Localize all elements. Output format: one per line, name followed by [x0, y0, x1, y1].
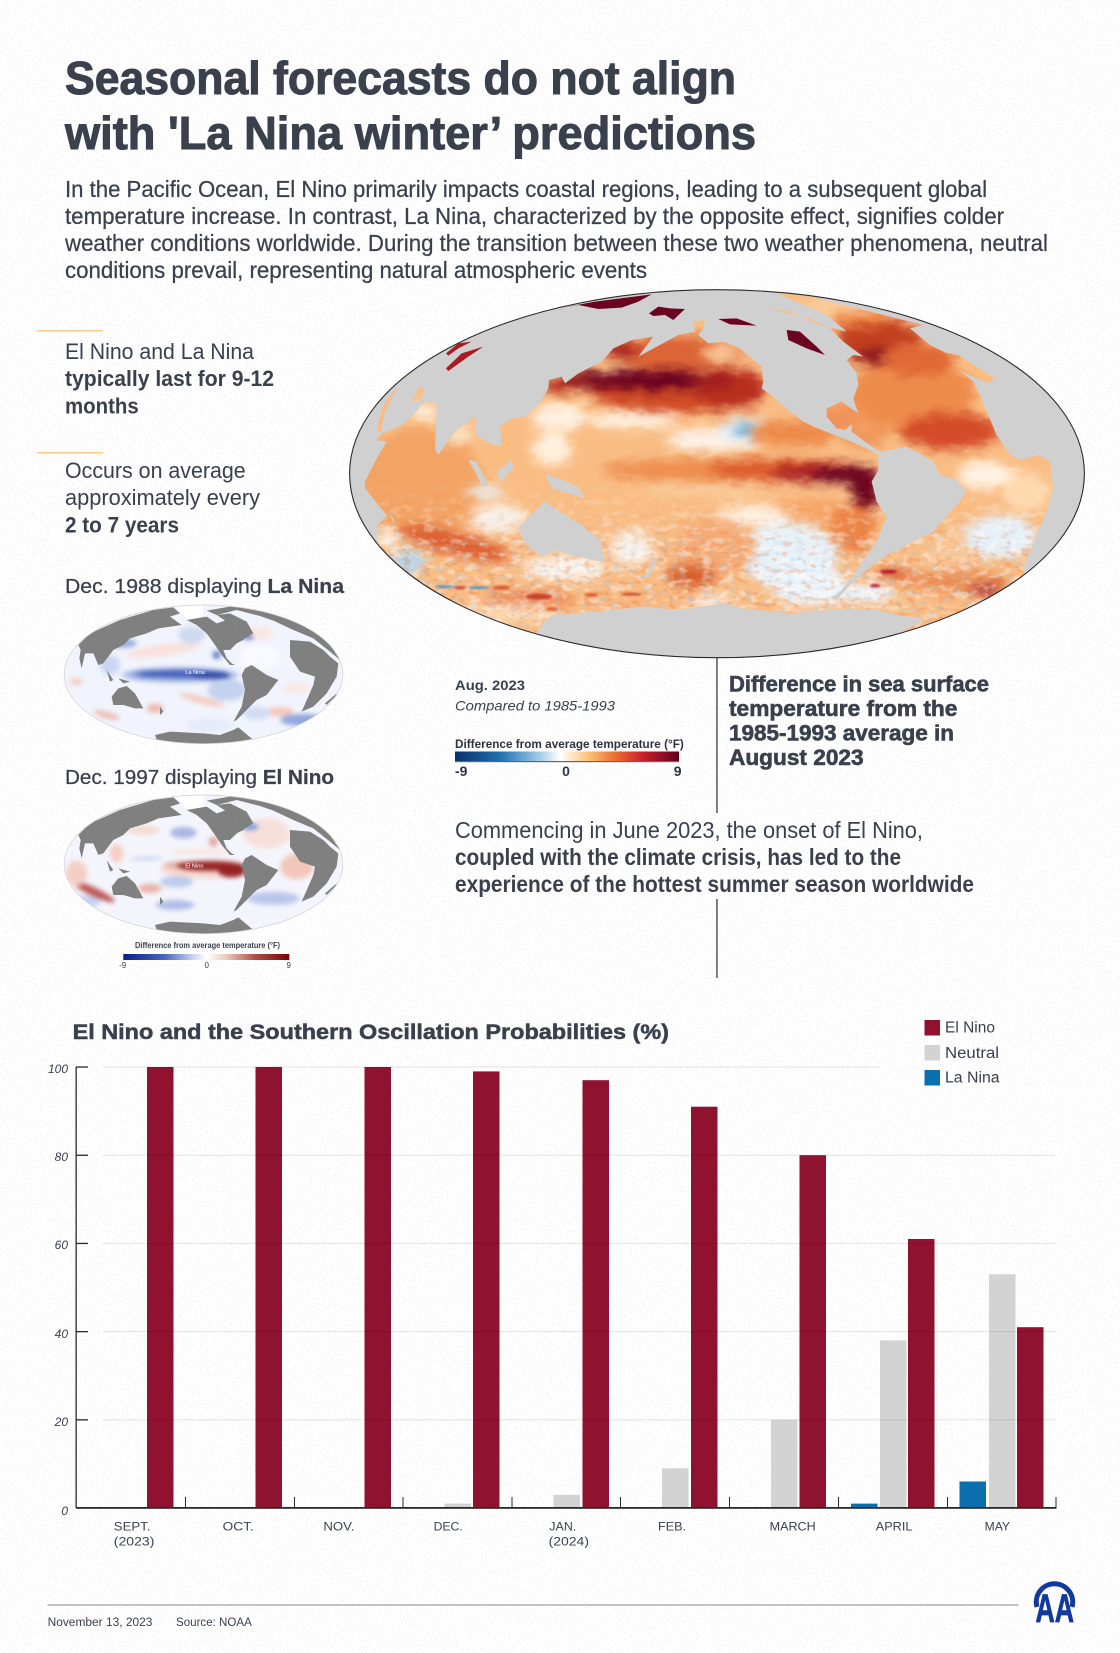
text block: El Nino onset and hottest summer: coupled with the climate crisis, has led to the: [455, 844, 901, 870]
heading: difference in sea surface temperature: 1985-1993 average in: [729, 720, 954, 746]
heading: difference in sea surface temperature: [729, 672, 989, 770]
text block: El Nino onset and hottest summer: [455, 817, 974, 897]
chart title: El Nino and the Southern Oscillation Probabilities (%): [73, 1021, 669, 1044]
text block: El Nino onset and hottest summer: Commencing in June 2023, the onset of El Nino,: [455, 817, 923, 843]
legend: small maps color scale: 0: [204, 961, 209, 970]
callout: El Nino and La Nina duration: El Nino and La Nina: [65, 339, 255, 364]
title: with 'La Nina winter’ predictions: [64, 107, 756, 159]
x axis: [76, 1497, 1056, 1509]
x axis labels: (2023): [114, 1537, 155, 1549]
x axis labels: MAY: [985, 1522, 1010, 1534]
y axis labels: 100: [48, 1062, 68, 1076]
y axis labels: [48, 1062, 68, 1518]
chart legend: [924, 1020, 1000, 1087]
ocean mottling: [365, 486, 1048, 633]
intro paragraph: weather conditions worldwide. During the transition between these two weather phenomena, neutral: [64, 230, 1048, 256]
y axis labels: 0: [61, 1504, 68, 1518]
intro paragraph: In the Pacific Ocean, El Nino primarily impacts coastal regions, leading to a subsequent global: [65, 176, 987, 202]
legend item: La Nina: La Nina: [945, 1070, 1000, 1087]
title: [64, 52, 756, 159]
x axis labels: MARCH: [770, 1522, 816, 1534]
intro paragraph: [64, 176, 1048, 283]
legend: small maps color scale: Difference from average temperature (°F): [135, 941, 280, 950]
legend: small maps color scale: -9: [119, 961, 127, 970]
legend: main map color scale: 0: [562, 763, 570, 779]
x axis labels: APRIL: [876, 1522, 913, 1534]
small map: Dec. 1997 El Nino: [64, 794, 344, 934]
small map: Dec. 1988 La Nina: [64, 604, 344, 744]
legend: main map color scale: Difference from average temperature (°F): [455, 737, 684, 751]
y axis labels: 20: [54, 1415, 68, 1429]
legend item: El Nino: El Nino: [945, 1020, 995, 1037]
footer: date and source: [48, 1604, 1019, 1629]
bars: Neutral: [444, 1274, 1016, 1508]
legend: main map color scale: -9: [455, 763, 468, 779]
y axis: [76, 1066, 88, 1508]
legend: small maps color scale: [119, 941, 291, 970]
y axis labels: 80: [55, 1150, 68, 1164]
callout: El Nino and La Nina duration: [37, 330, 274, 418]
map caption: date and comparison: Aug. 2023: [455, 677, 525, 693]
heading: difference in sea surface temperature: temperature from the: [729, 696, 957, 721]
footer: date and source: Source: NOAA: [176, 1617, 252, 1629]
y axis labels: 40: [55, 1327, 68, 1341]
small map: Dec. 1997 El Nino: El Nino: [185, 863, 203, 869]
callout: El Nino and La Nina duration: months: [65, 394, 139, 418]
title: Seasonal forecasts do not align: [65, 52, 736, 104]
legend: small maps color scale: 9: [286, 961, 291, 970]
legend item: Neutral: Neutral: [945, 1045, 999, 1062]
y axis labels: 60: [55, 1238, 68, 1252]
intro paragraph: temperature increase. In contrast, La Nina, characterized by the opposite effect, signifies colder: [65, 203, 1004, 229]
x axis labels: [114, 1522, 1010, 1549]
logo: AA: [1036, 1584, 1074, 1631]
bar chart: ENSO probabilities: [48, 1062, 1056, 1549]
heading: Dec. 1997 El Nino: Dec. 1997 displaying El Nino: [65, 767, 334, 789]
map caption: date and comparison: Compared to 1985-1993: [455, 698, 615, 714]
legend: main map color scale: 9: [674, 763, 682, 779]
x axis labels: FEB.: [658, 1522, 686, 1534]
callout: El Nino and La Nina duration: typically last for 9-12: [65, 366, 274, 391]
x axis labels: SEPT.: [114, 1522, 150, 1534]
callout: occurrence frequency: [37, 452, 260, 538]
callout: occurrence frequency: Occurs on average: [65, 458, 246, 483]
bars: El Nino: [147, 1067, 1044, 1508]
legend: main map color scale: [455, 737, 684, 779]
footer: date and source: November 13, 2023: [48, 1617, 152, 1629]
world map: August 2023 sea surface temperature difference: [349, 289, 1085, 658]
small map: Dec. 1988 La Nina: La Nina: [185, 670, 206, 676]
bars: La Nina: [851, 1482, 986, 1508]
vertical connector line: [716, 899, 718, 978]
heading: Dec. 1988 La Nina: Dec. 1988 displaying La Nina: [65, 576, 345, 598]
heading: difference in sea surface temperature: Difference in sea surface: [729, 672, 989, 696]
callout: occurrence frequency: 2 to 7 years: [65, 512, 179, 538]
logo: AA: AA: [1036, 1587, 1074, 1631]
vertical connector line: [716, 658, 718, 813]
callout: occurrence frequency: approximately every: [65, 485, 260, 510]
x axis labels: OCT.: [223, 1522, 254, 1534]
map caption: date and comparison: [455, 677, 615, 714]
x axis labels: NOV.: [323, 1522, 354, 1534]
x axis labels: DEC.: [434, 1522, 463, 1534]
intro paragraph: conditions prevail, representing natural atmospheric events: [65, 257, 647, 283]
heading: difference in sea surface temperature: August 2023: [729, 745, 864, 770]
Arctic and inland warm patches: [446, 294, 825, 371]
streaks along the Southern Ocean: [435, 570, 897, 611]
x axis labels: (2024): [549, 1537, 589, 1549]
text block: El Nino onset and hottest summer: experience of the hottest summer season worldwide: [455, 871, 974, 897]
x axis labels: JAN.: [549, 1522, 576, 1534]
